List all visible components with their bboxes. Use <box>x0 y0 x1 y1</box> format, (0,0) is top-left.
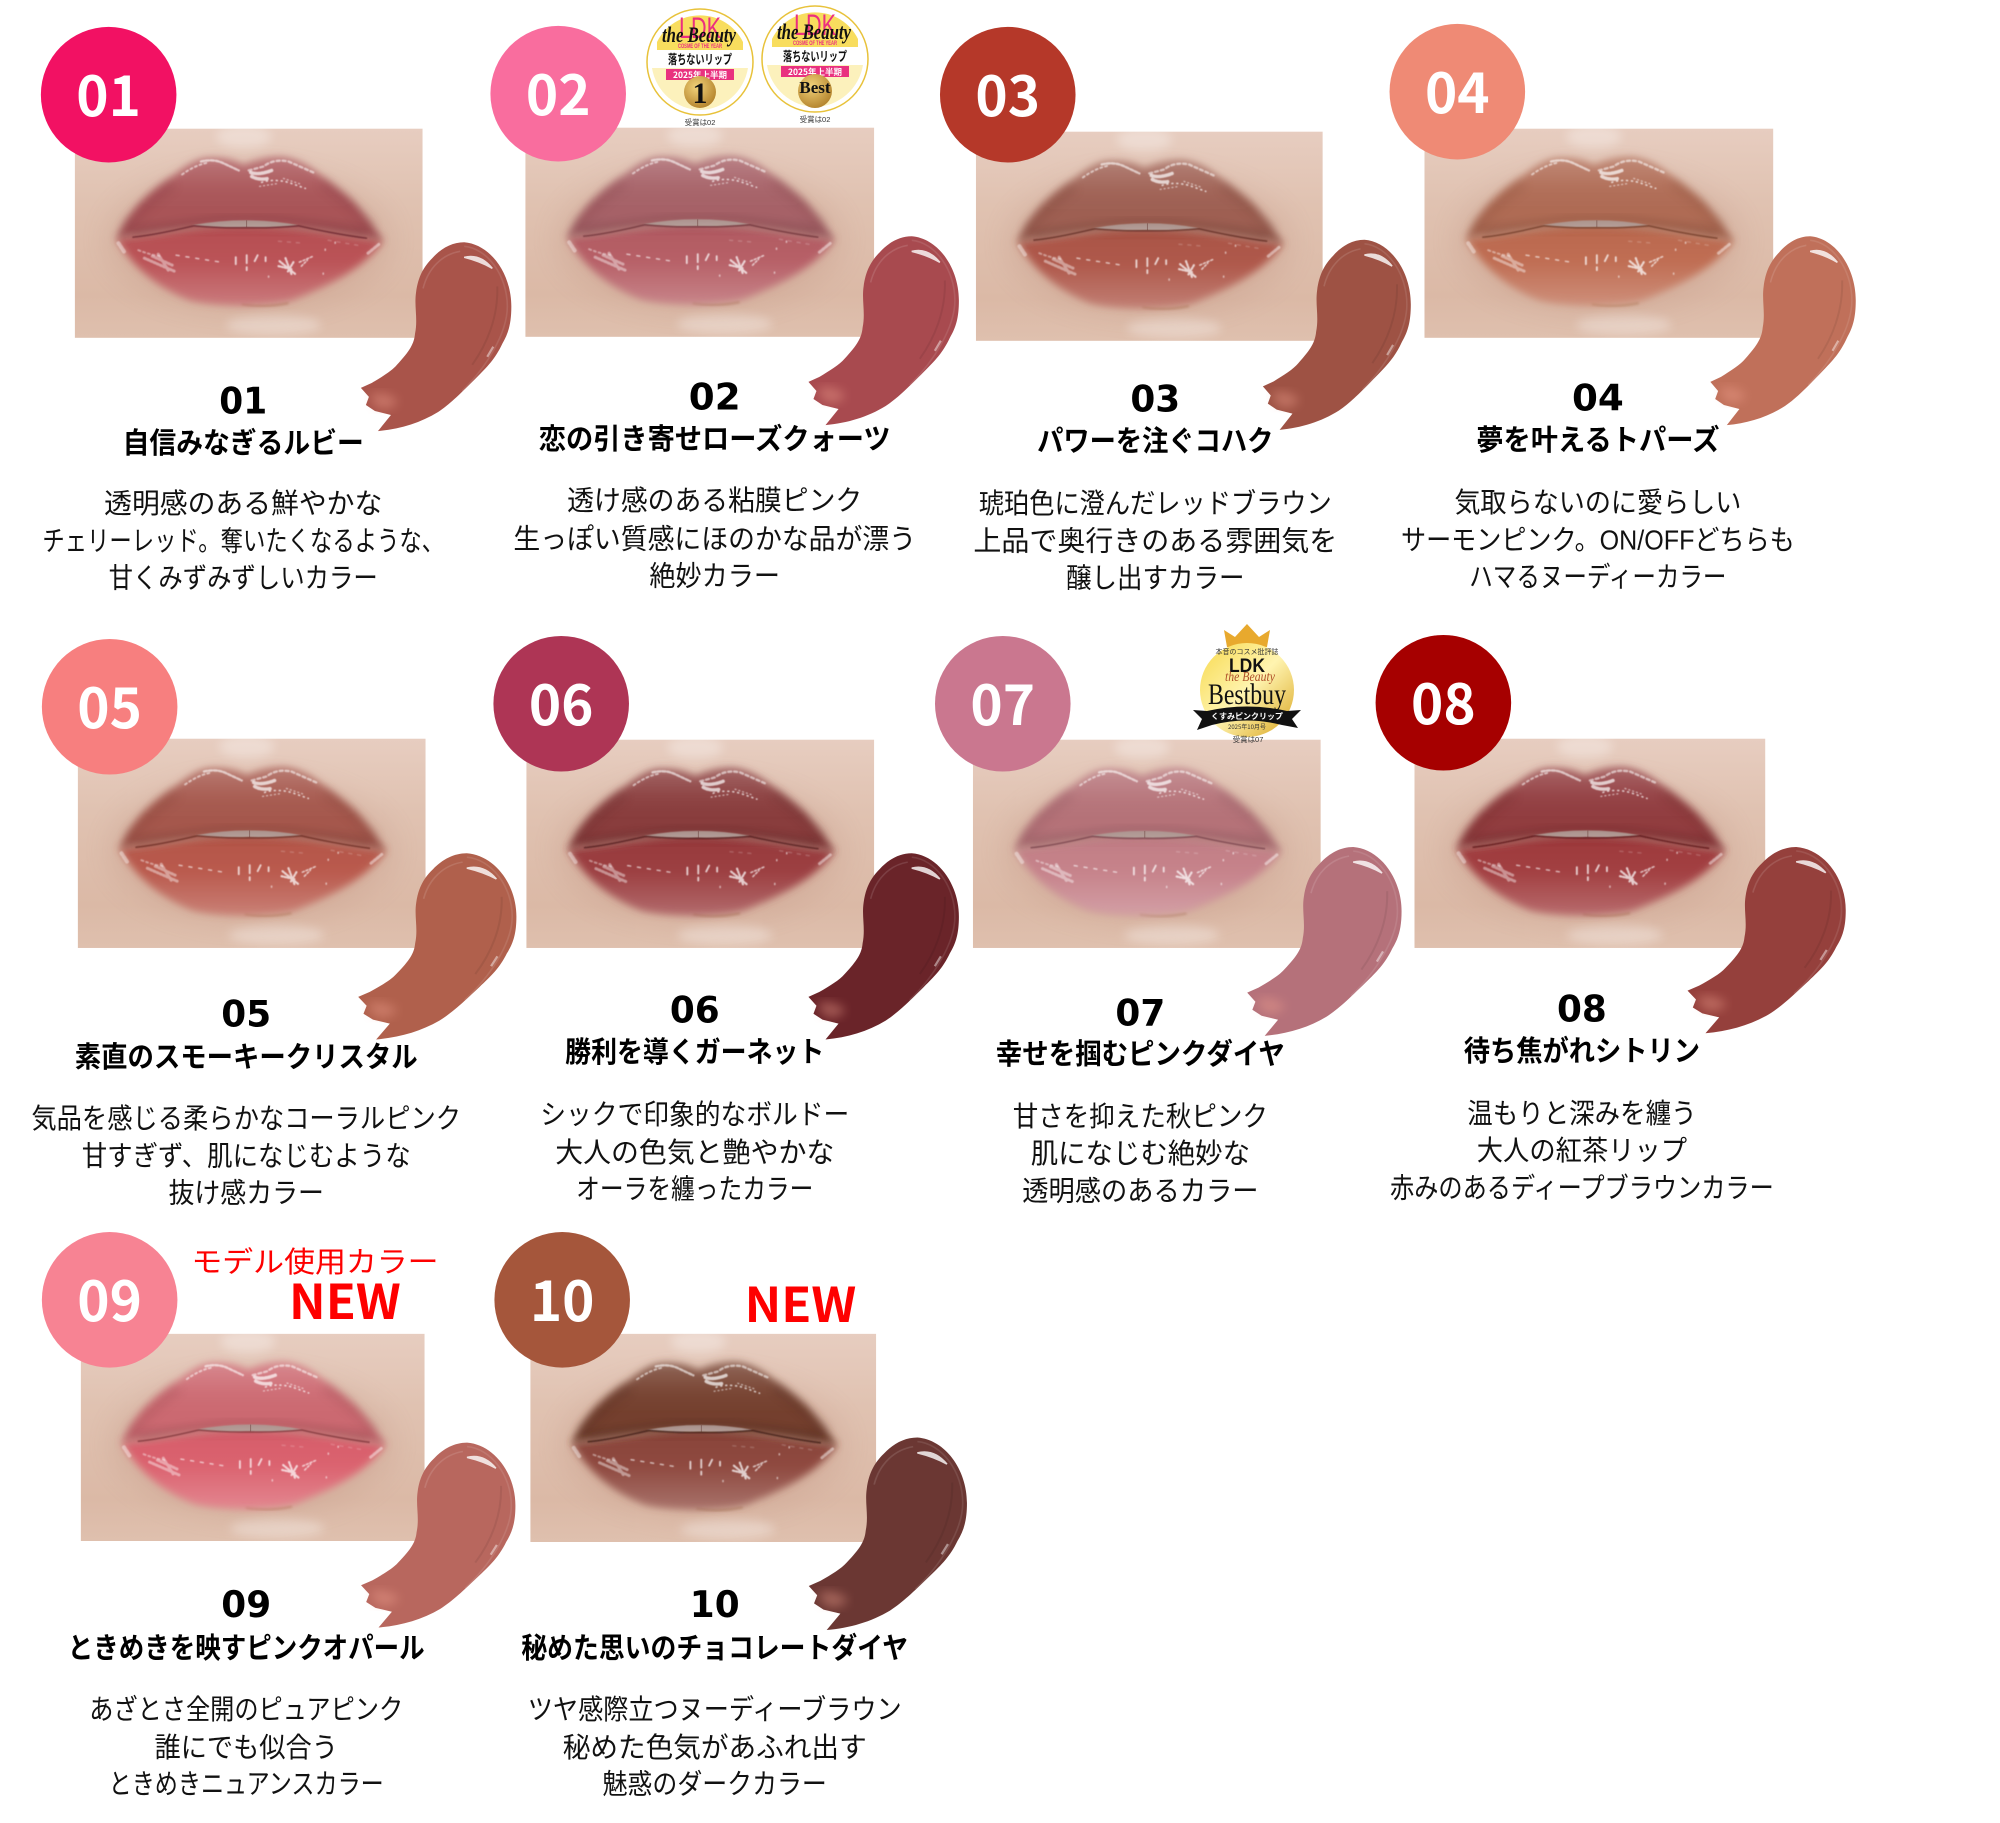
description 03 <box>973 488 1337 594</box>
description 01 <box>42 488 444 594</box>
award badge: LDK first place: 落ちないリップ <box>668 49 732 68</box>
number badge 06: 06 <box>529 661 594 741</box>
award badge: LDK best buy: 2025年10月号 <box>1228 722 1266 731</box>
award badge: LDK best buy: Bestbuy <box>1208 678 1286 711</box>
description 02 <box>513 485 916 592</box>
colour swatch 10 <box>809 1437 967 1630</box>
NEW label 10: NEW <box>745 1267 856 1336</box>
description 06: オーラを纏ったカラー <box>576 1174 813 1205</box>
shade name 03: パワーを注ぐコハク <box>1037 418 1273 460</box>
colour swatch 02 <box>808 236 959 425</box>
award badge: LDK first place: COSME OF THE YEAR <box>678 44 722 50</box>
award badge: LDK first place: 受賞は02 <box>685 117 715 127</box>
award badge: LDK first place: the Beauty <box>662 22 736 47</box>
shade number 02: 02 <box>689 376 741 419</box>
shade name 01: 自信みなぎるルビー <box>123 420 364 462</box>
lip photo 03 <box>976 128 1323 341</box>
description 01: 甘くみずみずしいカラー <box>109 563 378 594</box>
model colour label: モデル使用カラー <box>191 1239 439 1281</box>
lip photo 04 <box>1424 125 1773 338</box>
lip photo 07 <box>973 736 1321 948</box>
shade name 10: 秘めた思いのチョコレートダイヤ <box>521 1625 908 1667</box>
number badge 10 <box>494 1232 630 1368</box>
panel: shade 07 <box>935 624 1402 1207</box>
colour swatch 06 <box>808 853 959 1039</box>
description 08: 大人の紅茶リップ <box>1477 1135 1687 1166</box>
award badge: LDK best: 受賞は02 <box>800 114 830 124</box>
description 07: 甘さを抑えた秋ピンク <box>1013 1101 1268 1132</box>
number badge 04 <box>1390 24 1525 159</box>
award badge: LDK best buy: 本音のコスメ批評誌 <box>1216 647 1278 657</box>
shade name 02: 恋の引き寄せローズクォーツ <box>539 416 891 458</box>
lip photo 01 <box>75 125 423 338</box>
number badge 06 <box>493 636 629 772</box>
award badge: LDK first place: 2025年上半期 <box>673 69 727 81</box>
description 05 <box>31 1103 461 1209</box>
number badge 09 <box>42 1232 177 1368</box>
lip photo 10 <box>530 1330 876 1542</box>
lip photo 05 <box>78 735 426 948</box>
description 01: チェリーレッド。奪いたくなるような、 <box>42 526 444 557</box>
shade number 05: 05 <box>221 993 271 1036</box>
description 05: 甘すぎず、肌になじむような <box>82 1141 411 1172</box>
number badge 01 <box>41 27 176 162</box>
panel: shade 10 <box>494 1232 967 1800</box>
colour swatch 07 <box>1247 847 1402 1036</box>
lip photo 08 <box>1414 735 1765 948</box>
shade name 04: 夢を叶えるトパーズ <box>1476 417 1720 459</box>
shade name 08: 待ち焦がれシトリン <box>1464 1028 1700 1070</box>
description 07 <box>1013 1101 1268 1207</box>
award badge: LDK best: LDK <box>794 9 836 42</box>
award badge: LDK best buy: LDK <box>1229 656 1265 677</box>
award badge: LDK best: 落ちないリップ <box>783 46 847 65</box>
description 09: ときめきニュアンスカラー <box>109 1769 384 1800</box>
number badge 01: 01 <box>76 52 141 132</box>
number badge 07 <box>935 636 1071 772</box>
description 10: 魅惑のダークカラー <box>603 1769 827 1800</box>
description 02: 透け感のある粘膜ピンク <box>567 485 862 516</box>
number badge 09: 09 <box>77 1257 142 1337</box>
award badge: LDK best buy <box>1193 624 1301 744</box>
description 02: 絶妙カラー <box>649 561 780 592</box>
description 02: 生っぽい質感にほのかな品が漂う <box>513 524 916 555</box>
shade name 06: 勝利を導くガーネット <box>565 1029 824 1071</box>
shade name 05: 素直のスモーキークリスタル <box>75 1034 418 1076</box>
number badge 03 <box>940 27 1076 162</box>
description 03: 上品で奥行きのある雰囲気を <box>973 526 1337 557</box>
description 10: 秘めた色気があふれ出す <box>563 1732 867 1763</box>
number badge 10: 10 <box>530 1257 595 1337</box>
description 06 <box>540 1099 849 1205</box>
description 09: あざとさ全開のピュアピンク <box>89 1694 403 1725</box>
description 10 <box>528 1694 902 1800</box>
award badge: LDK first place: LDK <box>679 12 721 45</box>
award badge: LDK best: COSME OF THE YEAR <box>793 41 837 47</box>
award badge: LDK best <box>762 6 868 124</box>
lip photo 09 <box>81 1330 425 1541</box>
shade number 06: 06 <box>670 989 720 1032</box>
colour swatch 09 <box>361 1443 515 1628</box>
panel: shade 01 <box>41 27 511 594</box>
colour swatch 04 <box>1710 236 1856 425</box>
description 10: ツヤ感際立つヌーディーブラウン <box>528 1694 902 1725</box>
description 08 <box>1390 1098 1774 1204</box>
number badge 03: 03 <box>975 52 1040 132</box>
panel: shade 05 <box>31 639 516 1209</box>
description 09: 誰にでも似合う <box>155 1732 338 1763</box>
description 01: 透明感のある鮮やかな <box>104 488 382 519</box>
panel: shade 06 <box>493 636 959 1205</box>
shade number 09: 09 <box>221 1583 271 1626</box>
shade number 07: 07 <box>1115 992 1165 1035</box>
description 03: 琥珀色に澄んだレッドブラウン <box>979 488 1332 519</box>
description 08: 温もりと深みを纏う <box>1467 1098 1697 1129</box>
shade number 10: 10 <box>690 1583 740 1626</box>
number badge 08: 08 <box>1411 660 1476 740</box>
award badge: LDK best: Best <box>799 78 831 97</box>
panel: shade 02 <box>490 6 959 592</box>
NEW label 09: NEW <box>289 1264 401 1333</box>
panel: shade 03 <box>940 27 1411 594</box>
description 05: 気品を感じる柔らかなコーラルピンク <box>31 1103 461 1134</box>
description 07: 肌になじむ絶妙な <box>1031 1138 1250 1169</box>
panel: shade 08 <box>1376 635 1846 1204</box>
panel: shade 09 <box>42 1232 515 1800</box>
panel: shade 04 <box>1390 24 1856 593</box>
shade name 09: ときめきを映すピンクオパール <box>68 1625 425 1667</box>
award badge: LDK best: 2025年上半期 <box>788 66 842 78</box>
number badge 02 <box>490 26 626 161</box>
lip photo 02 <box>525 124 874 337</box>
shade number 03: 03 <box>1130 378 1180 421</box>
number badge 08 <box>1376 635 1511 771</box>
award badge: LDK best buy: くすみピンクリップ <box>1211 711 1283 722</box>
lip photo 06 <box>526 736 874 948</box>
description 05: 抜け感カラー <box>168 1178 324 1209</box>
number badge 02: 02 <box>526 51 591 131</box>
colour swatch 05 <box>358 853 516 1039</box>
award badge: LDK best buy: the Beauty <box>1225 670 1276 685</box>
award badge: LDK first place <box>647 9 753 127</box>
award badge: LDK first place: 1 <box>692 77 707 110</box>
description 08: 赤みのあるディープブラウンカラー <box>1390 1173 1774 1204</box>
number badge 04: 04 <box>1425 49 1490 129</box>
shade number 08: 08 <box>1557 988 1607 1031</box>
shade number 04: 04 <box>1572 377 1624 420</box>
award badge: LDK best buy: 受賞は07 <box>1233 734 1263 744</box>
description 04: 気取らないのに愛らしい <box>1454 487 1741 518</box>
shade name 07: 幸せを掴むピンクダイヤ <box>996 1031 1285 1073</box>
description 04: ハマるヌーディーカラー <box>1469 562 1726 593</box>
colour swatch 01 <box>361 242 511 431</box>
number badge 05: 05 <box>77 664 142 744</box>
award badge: LDK best: the Beauty <box>777 19 851 44</box>
number badge 05 <box>42 639 177 775</box>
description 04: サーモンピンク。ON/OFFどちらも <box>1401 525 1795 556</box>
description 04 <box>1401 487 1795 593</box>
colour swatch 03 <box>1263 240 1411 430</box>
description 06: シックで印象的なボルドー <box>540 1099 849 1130</box>
description 07: 透明感のあるカラー <box>1022 1176 1258 1207</box>
description 09 <box>89 1694 403 1800</box>
description 03: 醸し出すカラー <box>1066 563 1245 594</box>
description 06: 大人の色気と艶やかな <box>555 1137 834 1168</box>
colour swatch 08 <box>1688 847 1846 1033</box>
shade number 01: 01 <box>219 380 267 423</box>
number badge 07: 07 <box>970 661 1035 741</box>
